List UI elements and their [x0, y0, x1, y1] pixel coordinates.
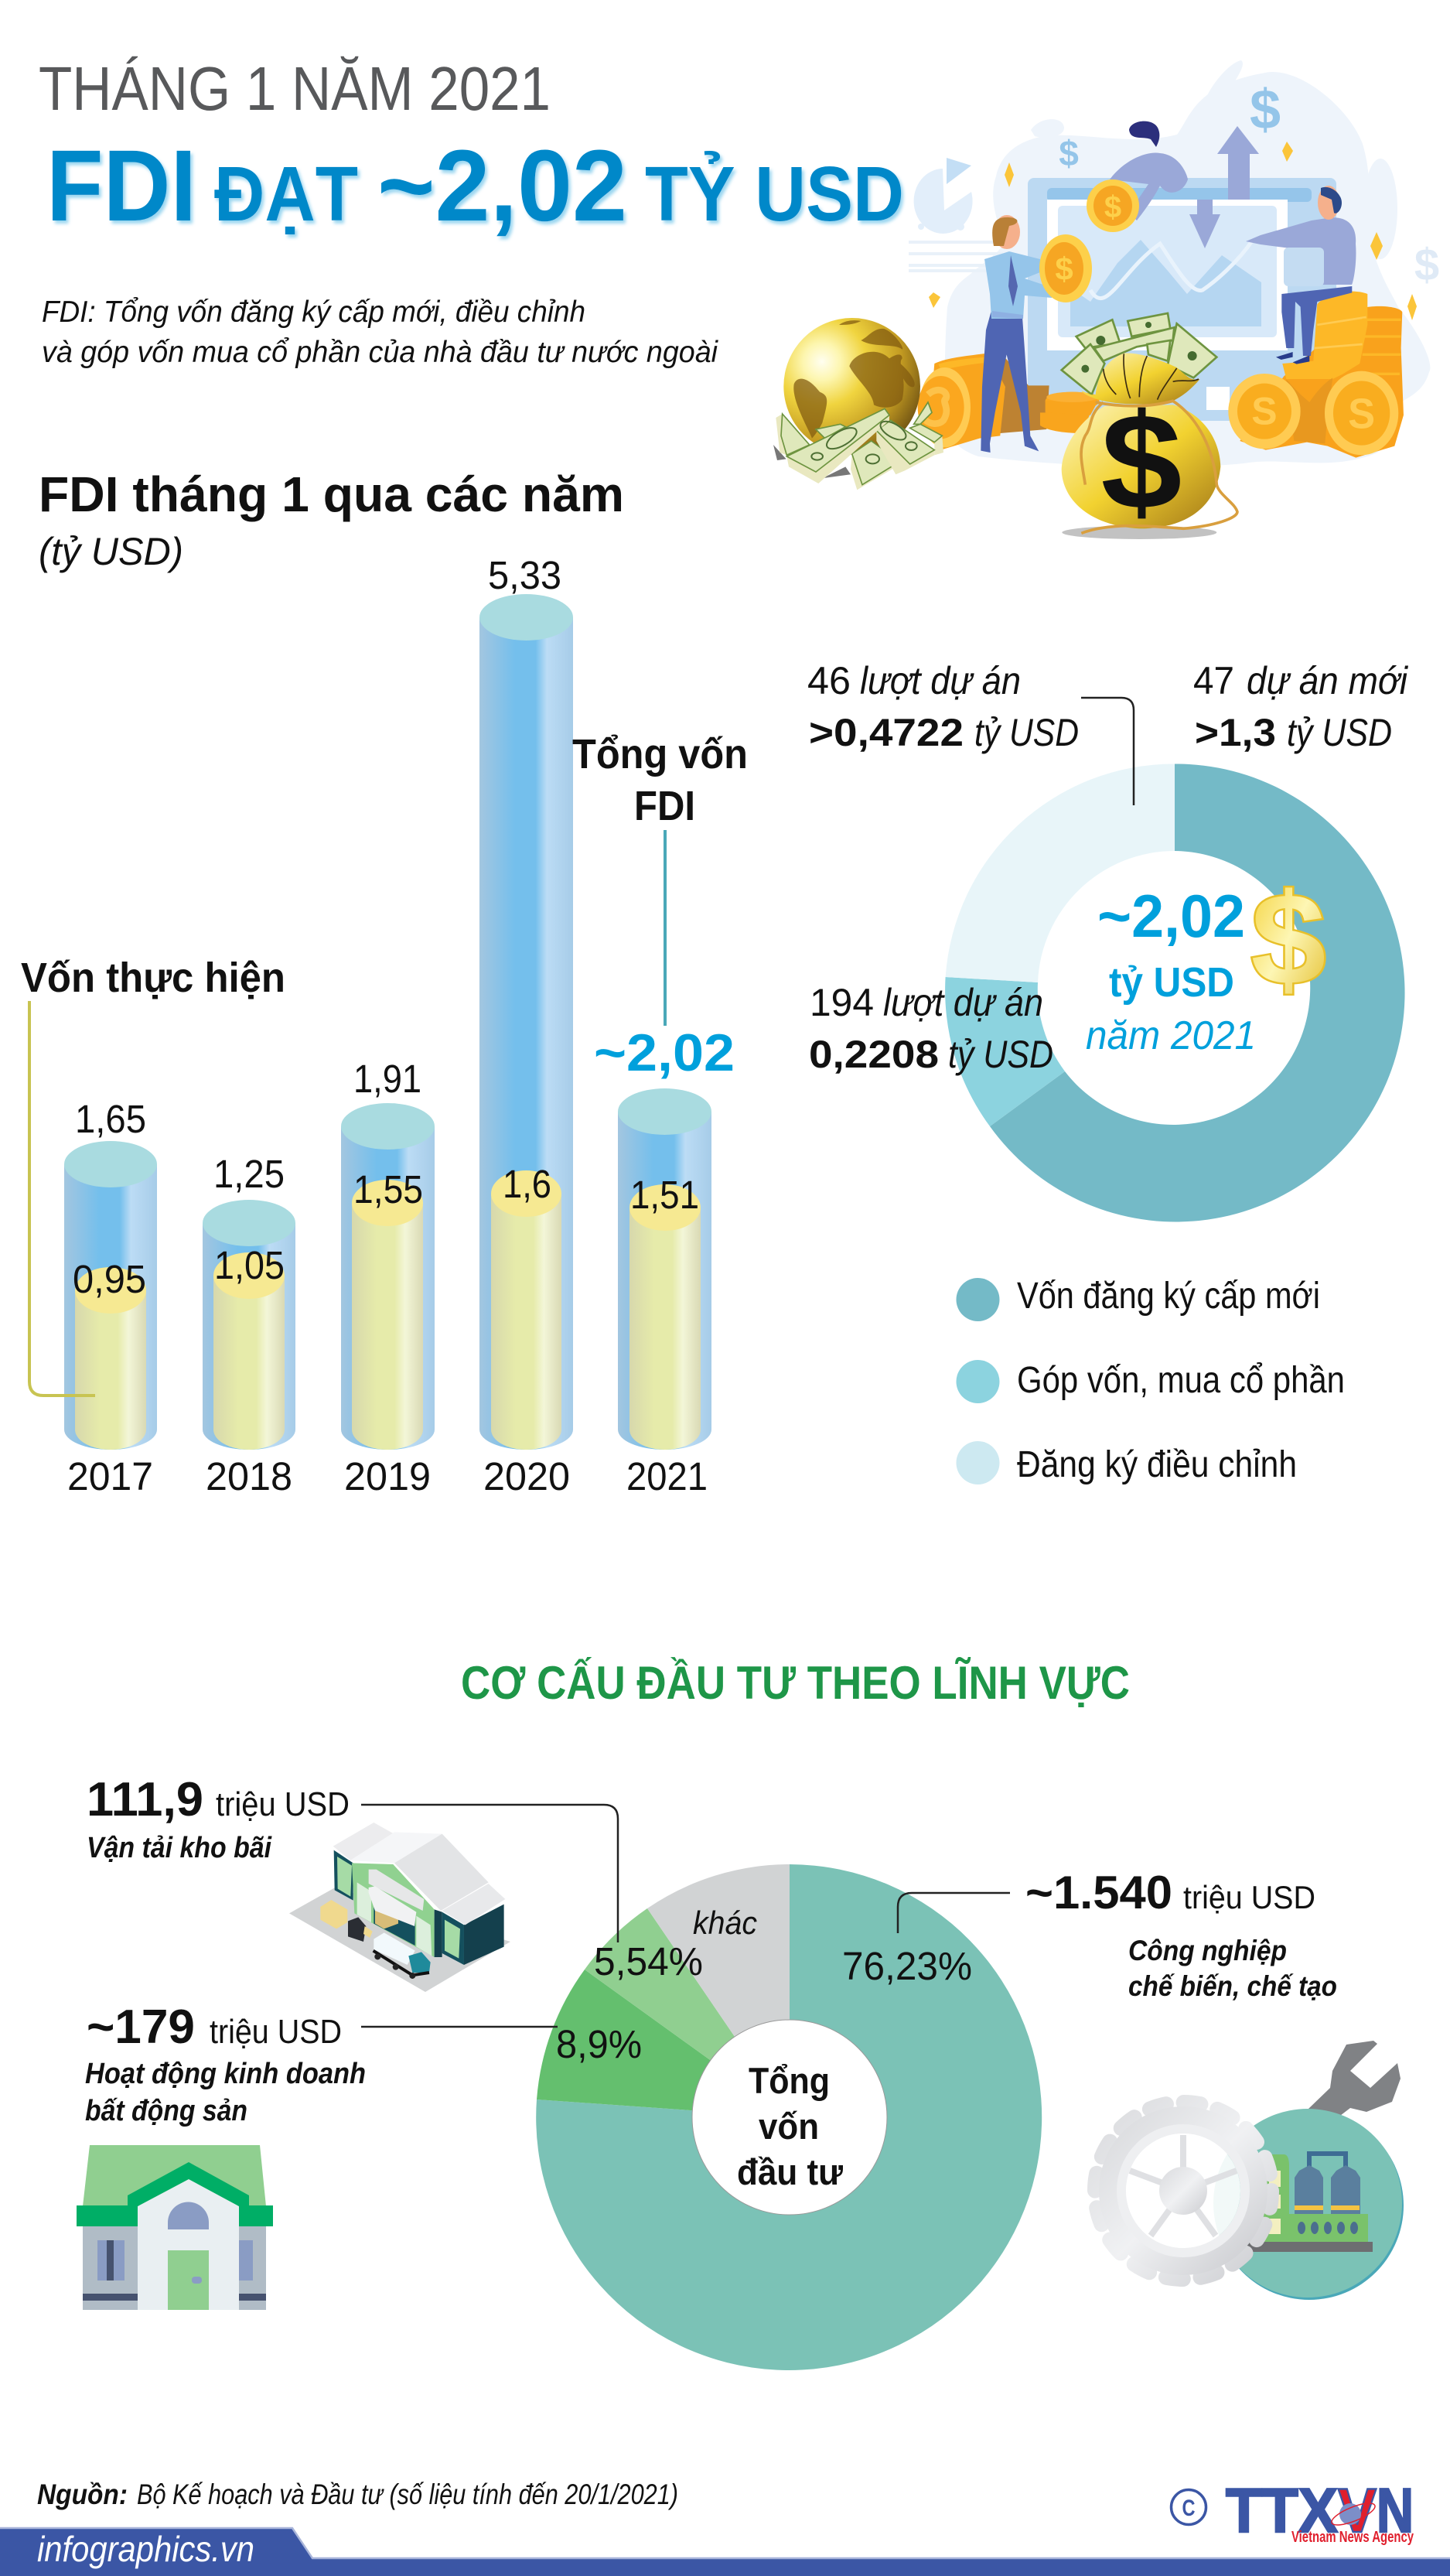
heading: FDI by year: FDI tháng 1 qua các năm	[39, 466, 624, 522]
source line: Nguồn:	[37, 2479, 128, 2510]
realised values: 1,55	[353, 1167, 423, 1211]
donut center total: tỷ USD	[1109, 959, 1234, 1006]
callout: manufacturing: Công nghiệp	[1128, 1935, 1287, 1966]
callout: real estate: ~179	[87, 2000, 195, 2054]
leader line: total FDI capital	[664, 830, 667, 1026]
callout: transport and warehousing: triệu USD	[216, 1785, 350, 1823]
right coin stacks: S	[1348, 389, 1375, 437]
callout: real estate: bất động sản	[85, 2095, 247, 2127]
callout: real estate: triệu USD	[210, 2013, 342, 2051]
slice: transport 5.54%	[585, 1908, 790, 2117]
label: total FDI capital	[572, 731, 748, 829]
label: adjusted capital: 46	[807, 659, 851, 702]
year labels: 2020	[483, 1454, 570, 1498]
man leaning from monitor	[1087, 121, 1188, 232]
realised values: 0,95	[73, 1257, 146, 1301]
donut center total: năm 2021	[1086, 1013, 1256, 1058]
legend: Đăng ký điều chỉnh	[1017, 1444, 1297, 1485]
realised values: 1,05	[214, 1243, 285, 1287]
footer band: infographics.vn	[37, 2529, 254, 2569]
percent labels: 8,9%	[556, 2022, 642, 2066]
bar 2018	[203, 1200, 295, 1450]
year labels: 2019	[344, 1454, 431, 1498]
chart: capital structure donut	[807, 659, 1409, 1485]
title: headline: FDI	[46, 128, 196, 242]
total values	[75, 553, 561, 1196]
donut slice: share purchase	[945, 977, 1065, 1126]
label: new projects: >1,3	[1195, 711, 1276, 754]
slice: real estate 8.9%	[537, 1970, 790, 2117]
legend: Vốn đăng ký cấp mới	[1017, 1276, 1320, 1317]
year labels: 2017	[67, 1454, 153, 1498]
label: realised capital: Vốn thực hiện	[21, 955, 285, 1001]
total values: 1,91	[353, 1057, 421, 1101]
callout: manufacturing	[1025, 1867, 1337, 2002]
man holding coin, left	[773, 215, 1092, 453]
label: total FDI capital: FDI	[634, 783, 695, 829]
bar 2020	[479, 594, 573, 1450]
realised values: 1,6	[503, 1162, 551, 1206]
percent labels	[556, 1905, 972, 2066]
bar 2019	[341, 1103, 435, 1450]
label: total FDI capital: Tổng vốn	[572, 731, 748, 777]
callout: transport and warehousing	[87, 1773, 350, 1864]
callout: manufacturing: chế biến, chế tạo	[1128, 1970, 1337, 2002]
bar 2017	[64, 1141, 157, 1450]
icon: gear, wrench and factory	[1095, 2041, 1404, 2300]
label: share purchase: tỷ USD	[948, 1033, 1053, 1076]
label: share purchase: 0,2208	[809, 1033, 939, 1076]
definition text	[42, 296, 718, 369]
value: 2021 total: ~2,02	[594, 1023, 735, 1082]
logo: TTXVN: TTX	[1226, 2476, 1338, 2546]
illustration: investors, coins, globe and money bag	[773, 60, 1439, 539]
label: adjusted capital: >0,4722	[809, 711, 964, 754]
right coin stacks	[1228, 292, 1404, 458]
gold globe and stacks of banknotes	[773, 318, 943, 490]
logo: TTXVN	[1171, 2476, 1414, 2546]
percent labels: khác	[693, 1905, 757, 1941]
yellow sparkles	[929, 142, 1417, 320]
title: headline: TỶ USD	[645, 151, 904, 237]
label: adjusted capital	[807, 659, 1079, 754]
definition text: FDI: Tổng vốn đăng ký cấp mới, điều chỉnh	[42, 296, 585, 329]
donut center total	[1086, 882, 1256, 1058]
label: share purchase: 194	[810, 981, 874, 1024]
icon: gold dollar: $	[1251, 866, 1325, 1012]
callout: real estate: Hoạt động kinh doanh	[85, 2058, 366, 2090]
dollar signs: $	[1250, 79, 1281, 141]
leader line: transport	[361, 1805, 618, 1942]
icon: house	[77, 2145, 273, 2310]
label: new projects: tỷ USD	[1287, 711, 1392, 754]
label: adjusted capital: lượt dự án	[860, 659, 1021, 702]
label: share purchase	[809, 981, 1053, 1076]
banknotes in bag	[1062, 313, 1216, 395]
man holding coin, left: $	[1055, 251, 1073, 287]
icon: warehouse	[289, 1823, 510, 1992]
year labels	[67, 1454, 708, 1498]
faint text lines	[909, 241, 1003, 272]
leader line: manufacturing	[898, 1893, 1010, 1933]
man leaning from monitor: $	[1104, 190, 1121, 224]
bar 2021	[618, 1088, 711, 1450]
title: headline: ĐẠT	[214, 151, 358, 237]
legend: Góp vốn, mua cổ phần	[1017, 1360, 1345, 1401]
title: headline	[46, 128, 904, 242]
callout: manufacturing: triệu USD	[1183, 1879, 1315, 1915]
leader line: real estate	[361, 2026, 558, 2028]
label: new projects: 47	[1193, 659, 1234, 702]
title: month line: THÁNG 1 NĂM 2021	[39, 54, 551, 123]
banknote bundles	[776, 402, 943, 490]
donut center total: ~2,02	[1097, 882, 1245, 950]
leader line: adjusted capital	[1081, 698, 1134, 805]
dollar signs: $	[1059, 133, 1079, 173]
callout: transport and warehousing: 111,9	[87, 1773, 203, 1826]
pie center label	[692, 2020, 887, 2215]
heading: investment by sector: CƠ CẤU ĐẦU TƯ THEO LĨNH VỰC	[461, 1657, 1130, 1709]
arrow up	[1217, 126, 1259, 200]
donut slice: adjusted capital	[946, 764, 1175, 982]
illustration background blob	[945, 72, 1430, 467]
unit label: (tỷ USD)	[39, 530, 183, 573]
bag rope	[1081, 401, 1237, 533]
label: new projects	[1193, 659, 1409, 754]
dollar signs	[1059, 79, 1439, 290]
slice: other	[647, 1864, 790, 2117]
chart: sector pie	[536, 1864, 1042, 2370]
logo: TTXVN: N	[1377, 2476, 1414, 2546]
label: share purchase: lượt dự án	[883, 981, 1043, 1024]
pie center label: vốn	[759, 2106, 819, 2147]
arrow down	[1189, 200, 1220, 248]
footer band	[0, 2528, 1450, 2576]
total values: 1,25	[213, 1152, 285, 1196]
realised values	[73, 1162, 699, 1301]
money bag with dollar sign	[1062, 313, 1237, 539]
pie icon	[914, 158, 973, 234]
source line: Bộ Kế hoạch và Đầu tư (số liệu tính đến 20/1/2021)	[137, 2479, 678, 2510]
definition text: và góp vốn mua cổ phần của nhà đầu tư nước ngoài	[42, 336, 718, 369]
dollar signs: $	[1414, 240, 1439, 290]
pie center label: Tổng	[749, 2060, 830, 2101]
label: new projects: dự án mới	[1247, 659, 1409, 702]
percent labels: 76,23%	[842, 1944, 972, 1988]
slice: manufacturing 76.23%	[536, 1864, 1042, 2370]
left coin pile	[918, 354, 1100, 450]
logo: TTXVN: C	[1182, 2496, 1196, 2521]
pie center label: đầu tư	[737, 2151, 844, 2192]
title: headline: ~2,02	[377, 128, 627, 242]
legend	[956, 1276, 1345, 1485]
donut slice: new registration	[990, 764, 1405, 1221]
money bag with dollar sign: $	[1100, 386, 1182, 538]
total values: 5,33	[488, 553, 561, 597]
right coin stacks: S	[1251, 389, 1278, 432]
callout: manufacturing: ~1.540	[1025, 1867, 1172, 1918]
callout: transport and warehousing: Vận tải kho bãi	[87, 1832, 272, 1864]
realised values: 1,51	[630, 1173, 699, 1217]
logo: TTXVN: V	[1338, 2476, 1377, 2546]
callout: real estate	[85, 2000, 366, 2127]
monitor	[1028, 178, 1336, 421]
man sitting on coins, right	[1246, 186, 1356, 364]
year labels: 2021	[626, 1454, 708, 1498]
leader line: realised capital	[29, 1001, 95, 1396]
total values: 1,65	[75, 1097, 146, 1141]
year labels: 2018	[206, 1454, 292, 1498]
chart: cylinder bars	[21, 553, 748, 1498]
label: adjusted capital: tỷ USD	[974, 711, 1079, 754]
percent labels: 5,54%	[594, 1939, 703, 1983]
